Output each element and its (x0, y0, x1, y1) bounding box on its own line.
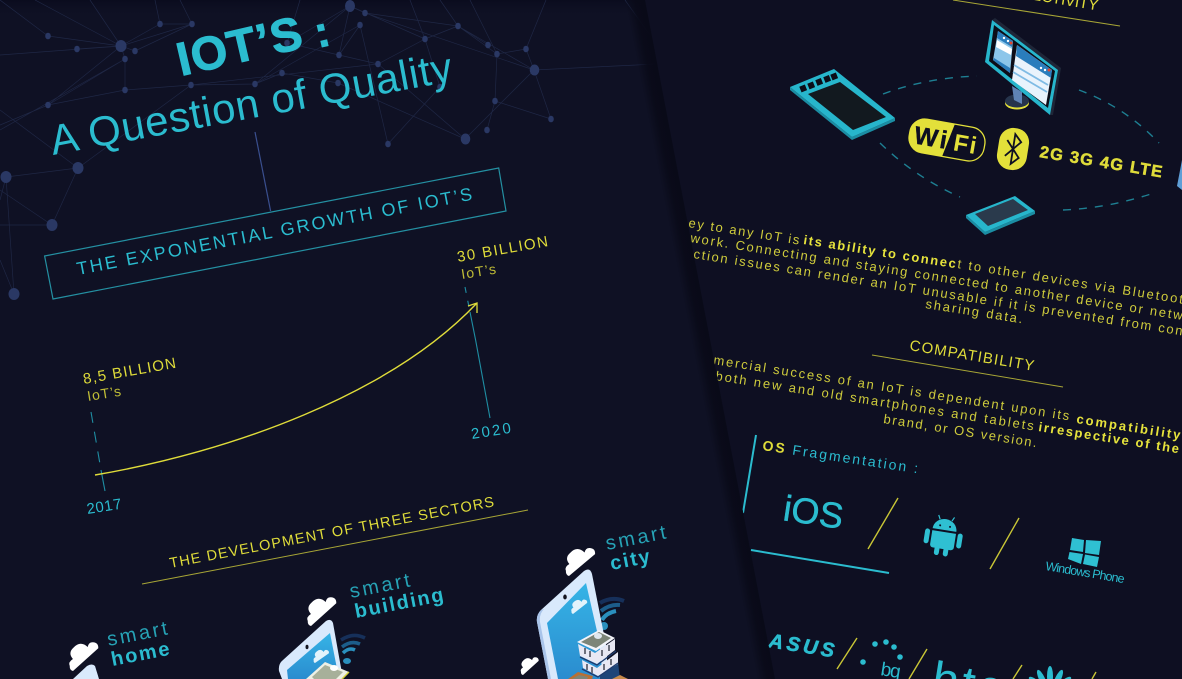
sector: smart city: smart (604, 522, 668, 555)
growth line chart: 2017 (85, 496, 123, 518)
paragraph: connectivity: work. Connecting and staying connected to another device or netw (689, 230, 1182, 323)
heading box: exponential growth (45, 168, 506, 299)
growth line chart: 8,5 BILLION (82, 355, 177, 388)
brand: huawei (1027, 666, 1073, 679)
icon: tablet (790, 69, 895, 140)
heading box: exponential growth: THE EXPONENTIAL GROWTH OF IOT’S (75, 184, 474, 279)
paragraph: connectivity: its ability to connec (803, 232, 957, 271)
OS fragmentation heading: OS Fragmentation : (762, 437, 919, 476)
brand: bq (860, 639, 903, 679)
paragraph: compatibility: compatibility (1076, 411, 1182, 443)
paragraph: compatibility: mercial success of an IoT is dependent upon its (713, 352, 1071, 423)
sector: smart building: smart (348, 570, 412, 603)
title: A Question of Quality (46, 43, 456, 164)
sector: smart home (61, 618, 171, 679)
heading: compatibility: COMPATIBILITY (908, 337, 1035, 375)
icon: wifi badge: Fi (951, 129, 979, 160)
iOS logo: iOS (781, 487, 846, 537)
paragraph: compatibility: irrespective of the (1038, 419, 1180, 456)
growth line chart (82, 233, 549, 518)
sector: smart home: home (109, 638, 171, 671)
right page (689, 0, 1182, 679)
icon: wifi badge (907, 117, 987, 163)
sector: smart city: city (608, 546, 653, 575)
icon: windows phone: Windows Phone (1045, 559, 1126, 586)
brand logos row (766, 630, 1096, 679)
growth line chart: IoT’s (86, 383, 122, 404)
connector line (255, 132, 271, 211)
heading: three sectors: THE DEVELOPMENT OF THREE SECTORS (168, 494, 495, 572)
icon: windows phone (1046, 538, 1124, 583)
icon: smartphone (966, 196, 1035, 235)
icon: partial tablet at right edge (1177, 160, 1182, 190)
paragraph: compatibility: both new and old smartphones and tablets (715, 368, 1035, 433)
icon: wifi badge: Wi (912, 121, 949, 155)
paragraph: compatibility: brand, or OS version. (883, 411, 1038, 450)
page fold shadow (625, 0, 775, 679)
sector: smart home: smart (105, 618, 170, 651)
sector: smart building (279, 570, 445, 679)
panel: OS fragmentation (743, 435, 1126, 586)
section heading: connectivity (953, 0, 1120, 26)
icon: bluetooth badge (996, 128, 1030, 170)
paragraph: connectivity: ey to any IoT is (688, 215, 801, 248)
sector: smart building: building (353, 584, 445, 623)
growth line chart: 30 BILLION (456, 233, 549, 266)
title: : (309, 7, 335, 58)
title: IOT’S (171, 6, 307, 86)
sector: smart city (516, 522, 668, 679)
icon: desktop monitor (985, 18, 1061, 115)
background network pattern (0, 0, 657, 300)
paragraph: connectivity: sharing data. (925, 296, 1024, 326)
network standards label: 2G 3G 4G LTE (1038, 143, 1164, 181)
dashed connection ring (880, 76, 1159, 210)
growth line chart: 2020 (470, 420, 512, 443)
paragraph: connectivity: ction issues can render an IoT unusable if it is prevented from con (693, 246, 1182, 338)
growth line chart: IoT’s (460, 261, 497, 282)
icon: android (924, 514, 963, 556)
heading: compatibility (872, 337, 1063, 387)
paragraph: compatibility (713, 352, 1182, 456)
brand: asus: ASUS (766, 630, 836, 662)
paragraph: connectivity: t to other devices via Bluetoot (957, 256, 1182, 307)
